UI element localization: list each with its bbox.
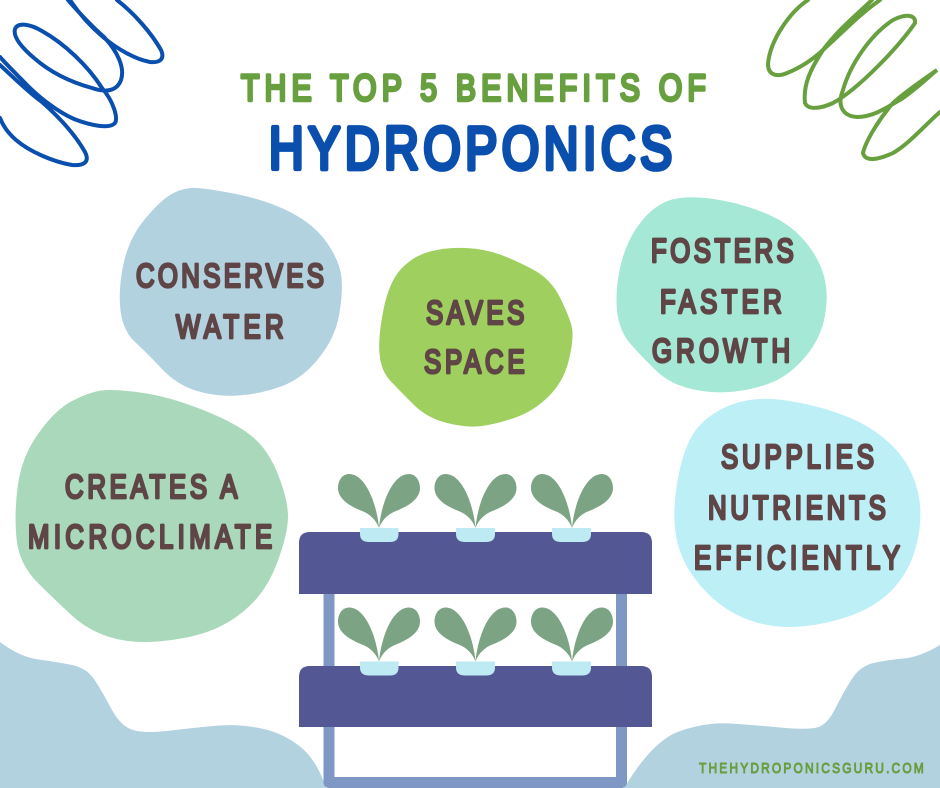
blob: supplies nutrients efficiently xyxy=(674,399,920,627)
bottom tray xyxy=(299,666,652,727)
blob: fosters faster growth: GROWTH xyxy=(652,333,790,370)
scribble: top right green xyxy=(768,0,940,159)
plant row: top xyxy=(338,474,613,542)
rack frame xyxy=(329,590,622,782)
blob: supplies nutrients efficiently: NUTRIENTS xyxy=(708,490,886,527)
hydroponic rack xyxy=(299,474,652,782)
blob: creates a microclimate xyxy=(16,390,288,642)
blob: fosters faster growth: FOSTERS xyxy=(651,233,794,270)
blob: supplies nutrients efficiently: EFFICIENTLY xyxy=(694,540,900,577)
footer website: THEHYDROPONICSGURU.COM xyxy=(699,760,924,776)
blob: conserves water: WATER xyxy=(176,309,284,346)
title line: hydroponics: HYDROPONICS xyxy=(269,115,672,182)
blob: conserves water xyxy=(120,188,342,396)
blob: fosters faster growth xyxy=(616,197,827,392)
blob: saves space xyxy=(379,248,573,427)
blob: saves space: SAVES xyxy=(426,295,524,332)
blob: conserves water: CONSERVES xyxy=(136,258,324,295)
title xyxy=(241,67,706,182)
scribble: top left blue xyxy=(0,0,162,165)
top tray xyxy=(299,532,652,594)
blob: fosters faster growth: FASTER xyxy=(660,284,782,321)
hill: bottom right xyxy=(624,645,940,788)
plant row: bottom xyxy=(338,608,613,676)
hill: bottom left xyxy=(0,642,326,788)
blob: creates a microclimate: CREATES A xyxy=(65,469,238,506)
blob: supplies nutrients efficiently: SUPPLIES xyxy=(721,439,874,476)
blob: creates a microclimate: MICROCLIMATE xyxy=(28,519,272,556)
title line: the top 5 benefits of: THE TOP 5 BENEFITS OF xyxy=(241,67,706,109)
blob: saves space: SPACE xyxy=(424,344,525,381)
